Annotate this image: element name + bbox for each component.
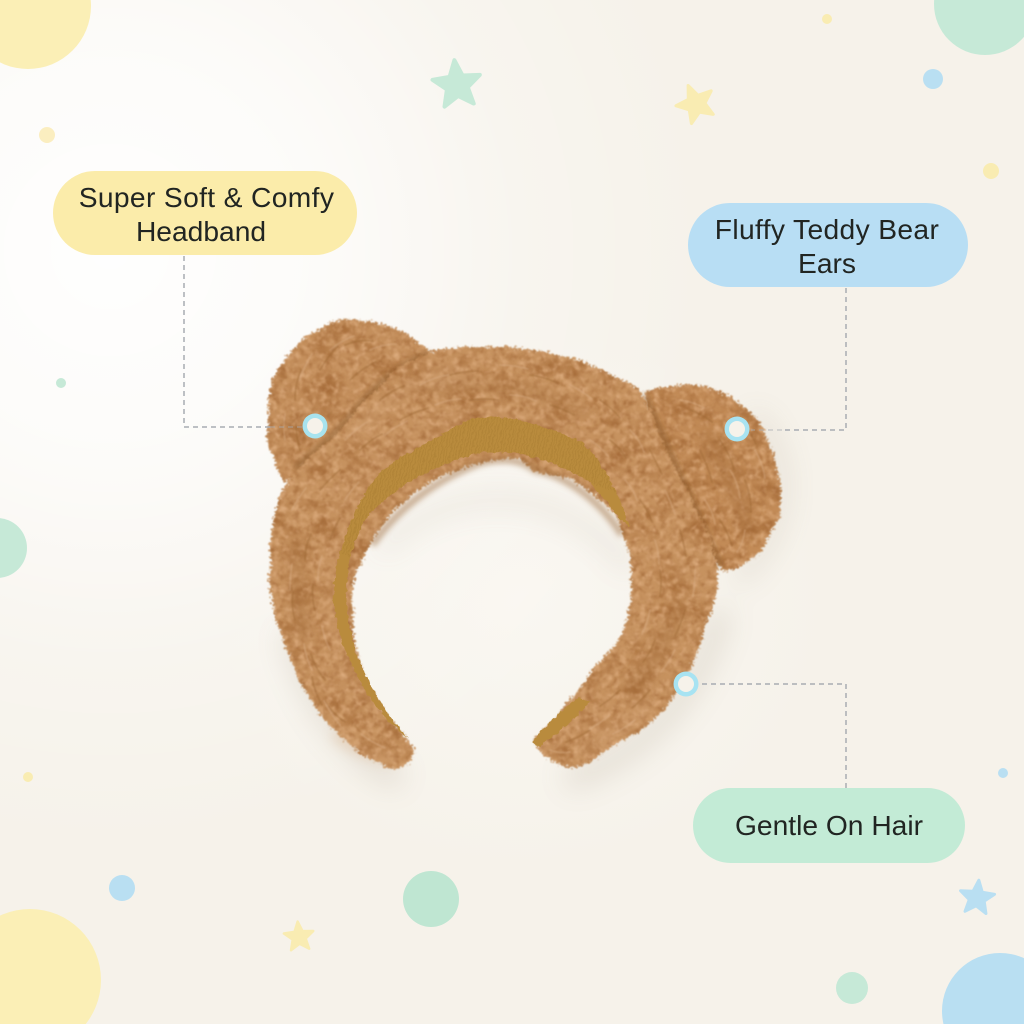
fur band: [270, 347, 717, 768]
fur shading: [297, 368, 682, 758]
label: fluffy teddy bear ears: [688, 203, 968, 287]
marker: right ear: [724, 416, 750, 442]
inner fringe shade: [372, 460, 622, 545]
left ear: [268, 320, 432, 482]
label: gentle on hair: Gentle On Hair: [735, 809, 923, 841]
marker: band: [674, 672, 698, 696]
label: fluffy teddy bear ears: Fluffy Teddy Bear: [715, 213, 939, 245]
leader lines: [184, 256, 846, 788]
label: fluffy teddy bear ears: Ears: [798, 247, 856, 279]
headband: fluffy teddy bear: [268, 320, 780, 768]
fur strands: [284, 336, 765, 753]
corduroy lining: [334, 417, 630, 739]
lining sliver at right tip: [532, 698, 590, 747]
decorative stars: [283, 58, 996, 951]
label: super soft and comfy headband: Super Soft & Comfy: [79, 181, 334, 213]
headband product shadow: [291, 415, 781, 780]
marker: left ear: [302, 414, 328, 438]
label: super soft and comfy headband: Headband: [136, 215, 266, 247]
right ear: [645, 385, 780, 572]
label: super soft and comfy headband: [53, 171, 357, 255]
label: gentle on hair: [693, 788, 965, 863]
